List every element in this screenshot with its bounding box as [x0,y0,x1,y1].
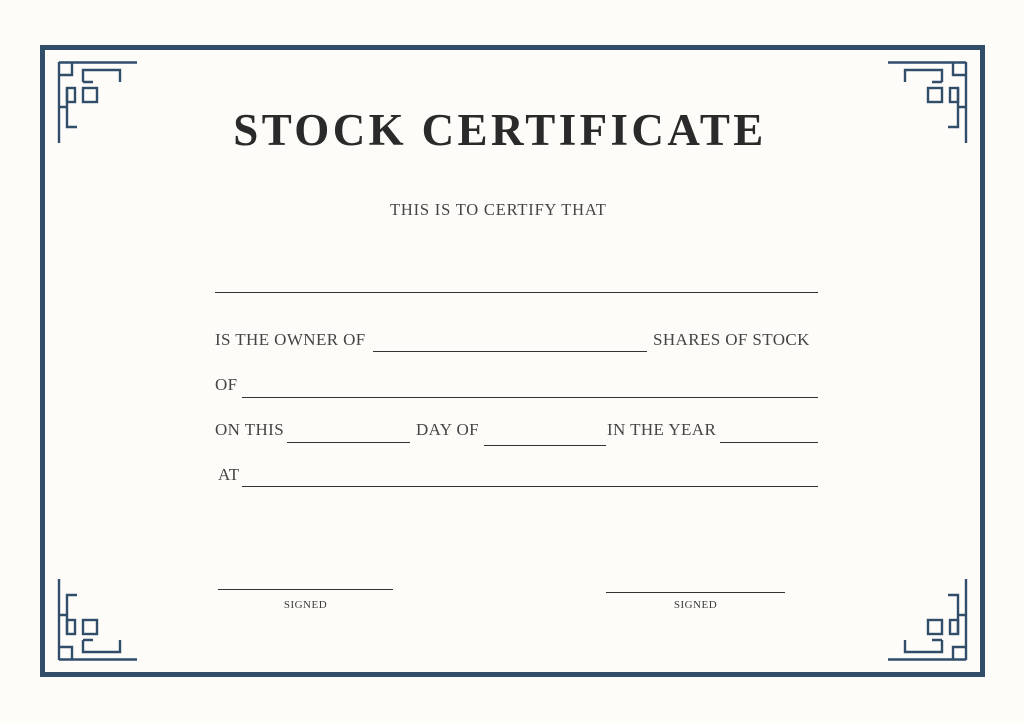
ornament: top-right [888,62,966,143]
subtitle: THIS IS TO CERTIFY THAT [390,200,607,219]
row: date: ON THIS [215,420,284,439]
title: STOCK CERTIFICATE [233,105,767,155]
row: at: AT [218,465,240,484]
row: owner of shares: IS THE OWNER OF [215,330,366,349]
text: IN THE YEAR [607,420,716,439]
row: of: OF [215,375,238,394]
name line [215,292,818,293]
signature right: SIGNED [674,599,717,611]
ornament: top-left [59,62,137,143]
text: SHARES OF STOCK [653,330,810,349]
ornament: bottom-left [59,579,137,660]
signature left: SIGNED [284,599,327,611]
text: DAY OF [416,420,479,439]
ornament: bottom-right [888,579,966,660]
